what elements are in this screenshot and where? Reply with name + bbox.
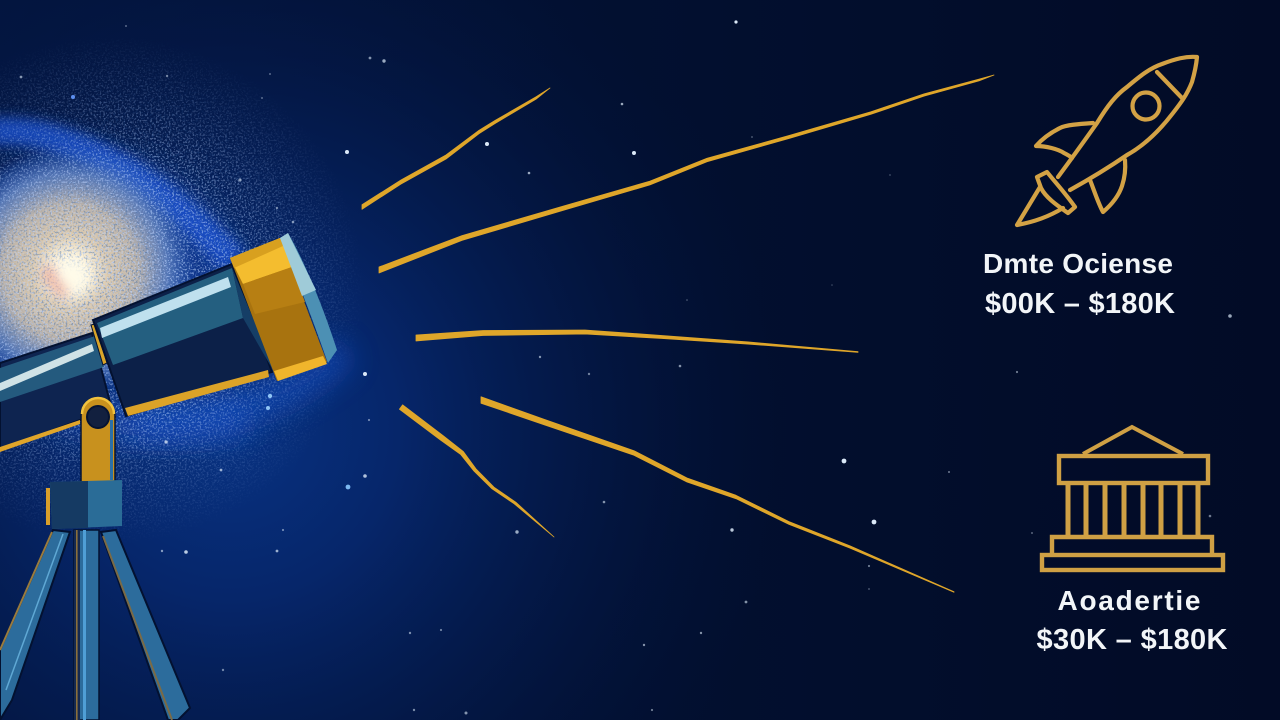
rear tube	[0, 333, 112, 452]
temple icon: Academia	[1042, 427, 1223, 570]
salary range: $30K – $180K	[1036, 624, 1228, 656]
label: Data Science salary	[983, 248, 1175, 320]
objective ring	[230, 238, 327, 381]
label: Academia salary	[1036, 585, 1228, 656]
beam 5	[481, 397, 954, 592]
mount post	[81, 398, 115, 482]
beam 4	[399, 405, 554, 537]
telescope	[0, 233, 337, 720]
salary range: $00K – $180K	[985, 288, 1175, 320]
collar	[46, 480, 122, 529]
galaxy	[0, 48, 360, 531]
beam 1	[362, 88, 550, 209]
beam 2	[379, 75, 994, 273]
tripod legs	[0, 530, 190, 720]
beam lines	[362, 75, 994, 592]
lens cap	[280, 233, 337, 363]
front tube	[93, 264, 274, 416]
label heading: Dmte Ociense	[983, 248, 1173, 279]
label heading: Aoadertie	[1058, 585, 1200, 616]
beam 3	[416, 330, 858, 352]
joint ring	[91, 324, 107, 365]
rocket icon: Data Science	[1017, 57, 1197, 225]
